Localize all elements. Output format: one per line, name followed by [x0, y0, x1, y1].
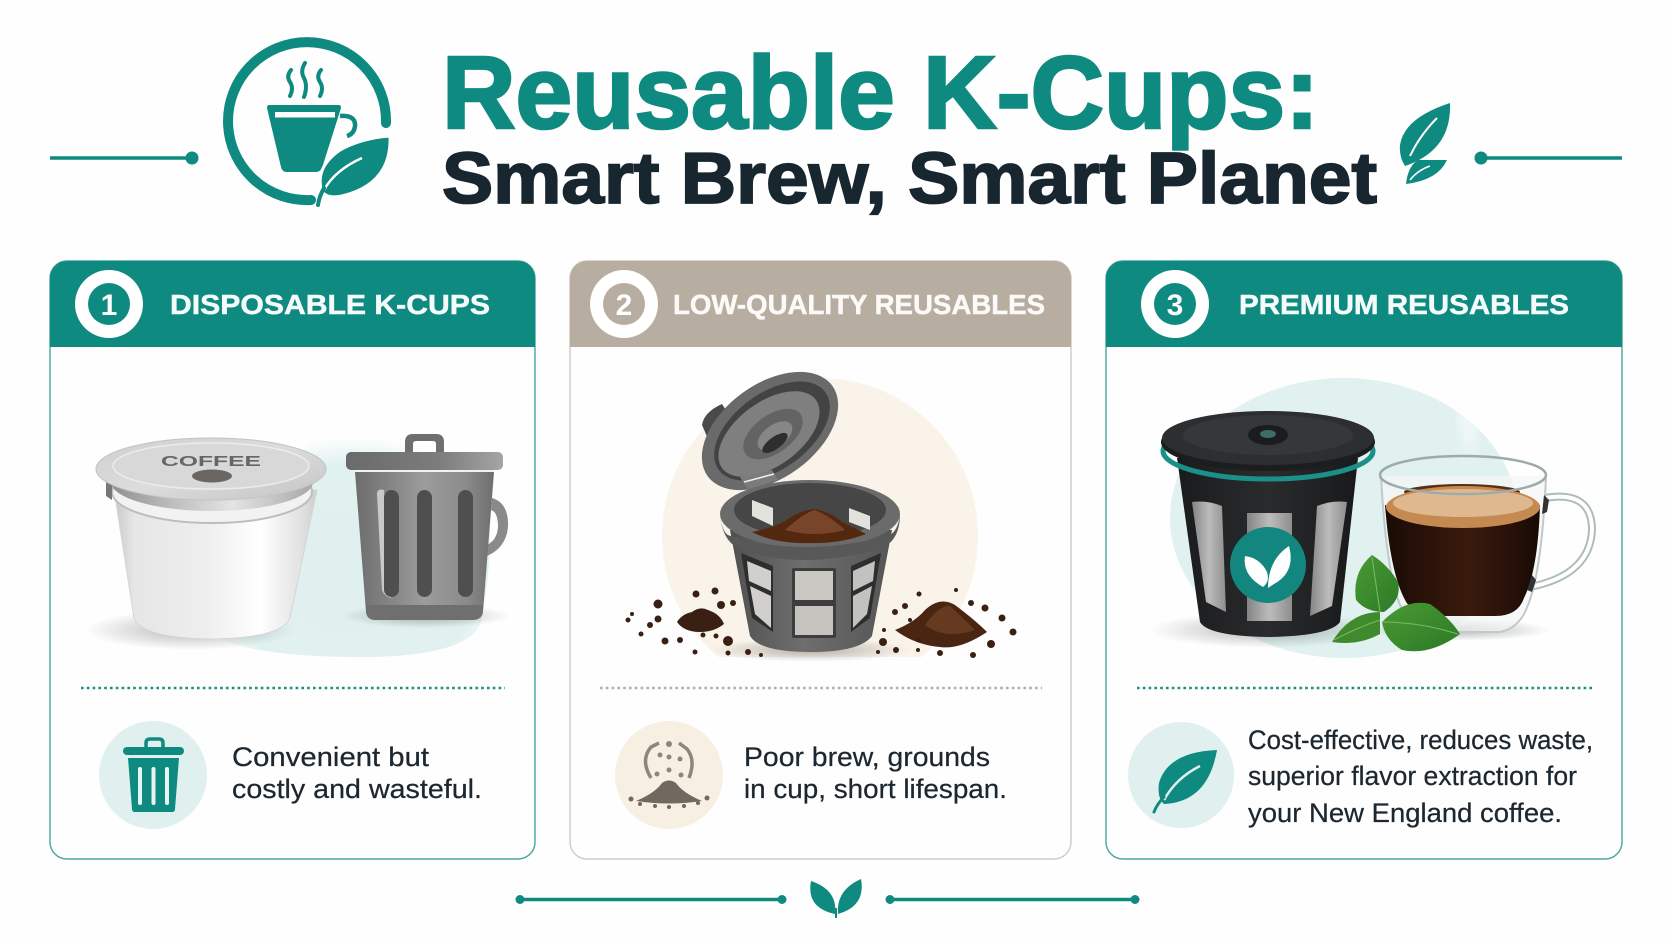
panel 3 frame — [1106, 261, 1622, 859]
panel 2 dotted divider — [600, 687, 1042, 689]
panel 2 header band — [570, 261, 1071, 347]
title: Reusable K-Cups: — [442, 35, 1319, 150]
number badge 1 — [75, 270, 143, 338]
disposable pod — [96, 438, 326, 639]
panel 1 heading: DISPOSABLE K-CUPS — [170, 289, 490, 320]
panel 3 heading: PREMIUM REUSABLES — [1239, 289, 1569, 320]
panel 3 header band — [1106, 261, 1622, 347]
panel 1 dotted divider — [81, 687, 505, 689]
panel 3 description: superior flavor extraction for — [1248, 761, 1577, 791]
panel 1 description: Convenient but — [232, 742, 430, 772]
logo icon: coffee cup with leaf in ring — [228, 42, 390, 205]
title: Smart Brew, Smart Planet — [442, 139, 1377, 219]
number badge 3: 3 — [1167, 289, 1183, 322]
open lid — [680, 348, 860, 514]
panel 2 description: in cup, short lifespan. — [744, 774, 1007, 804]
pod body — [730, 530, 892, 652]
illustration: flimsy grey reusable pod with spilled grounds — [626, 372, 1016, 660]
green leaves — [1332, 555, 1460, 651]
grounds in pod — [752, 509, 866, 543]
illustration: premium pod, glass of coffee and leaves — [1150, 370, 1592, 658]
number badge 2 — [590, 270, 658, 338]
header left line — [50, 152, 198, 164]
icon: leaf in circle — [1128, 722, 1234, 828]
panel 1 frame — [50, 261, 535, 859]
panel 2 heading: LOW-QUALITY REUSABLES — [673, 289, 1045, 320]
header right line — [1474, 152, 1622, 164]
panel 2 frame — [570, 261, 1071, 859]
pod rim — [720, 480, 900, 548]
panel: low-quality reusables — [570, 261, 1071, 859]
panel 3 description: Cost-effective, reduces waste, — [1248, 725, 1593, 755]
panel: disposable k-cups — [50, 261, 535, 859]
number badge 3 — [1141, 270, 1209, 338]
disposable pod: COFFEE — [161, 454, 262, 470]
panel 3 dotted divider — [1137, 687, 1592, 689]
icon: grounds leaking — [615, 721, 723, 829]
panel 2 description: Poor brew, grounds — [744, 742, 990, 772]
glass coffee mug — [1380, 456, 1592, 632]
number badge 1: 1 — [101, 289, 117, 322]
panel: premium reusables — [1106, 261, 1622, 859]
trash can — [346, 434, 508, 620]
number badge 2: 2 — [616, 289, 632, 322]
panel 1 header band — [50, 261, 535, 347]
footer ornament — [516, 879, 1140, 918]
title — [442, 35, 1377, 219]
icon: trash can in circle — [99, 721, 207, 829]
panel 3 description: your New England coffee. — [1248, 798, 1562, 828]
panel 1 description: costly and wasteful. — [232, 774, 482, 804]
spilled grounds — [626, 588, 1016, 658]
premium pod — [1161, 411, 1375, 637]
icon: title leaf sprig — [1400, 103, 1450, 184]
illustration: disposable pod and trash can — [85, 432, 510, 657]
